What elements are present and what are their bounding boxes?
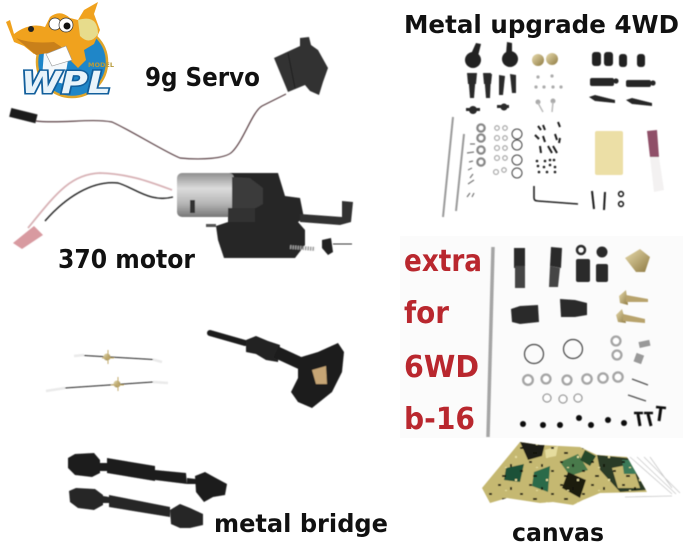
washers bbox=[523, 337, 623, 385]
canvas cover bbox=[480, 440, 680, 506]
yellow grease pad bbox=[595, 131, 623, 175]
small rings bbox=[494, 126, 507, 174]
logo: WPL dragon bbox=[6, 2, 114, 101]
label: b-16: b-16 bbox=[404, 402, 475, 437]
label: 6WD: 6WD bbox=[404, 350, 479, 385]
label: metal bridge: metal bridge bbox=[214, 509, 388, 538]
label: 370 motor: 370 motor bbox=[58, 245, 195, 275]
dark pins and nuts bbox=[592, 191, 605, 210]
drive shaft upper bbox=[68, 453, 227, 502]
bearings bbox=[477, 124, 485, 166]
long steel rods bbox=[443, 117, 453, 217]
allen key bbox=[534, 186, 578, 204]
axle with housing bbox=[210, 333, 344, 408]
servo with wire bbox=[9, 37, 328, 159]
black rods and dog bones bbox=[589, 78, 656, 106]
brass gears bbox=[532, 54, 544, 66]
parts: metal upgrade 4WD kit bbox=[443, 42, 664, 217]
label: for: for bbox=[404, 296, 449, 331]
grease tube bbox=[647, 130, 659, 157]
barrels and pins bbox=[638, 340, 650, 348]
label: canvas: canvas bbox=[512, 518, 604, 547]
brass diff gear bbox=[625, 249, 650, 272]
steering hubs bbox=[465, 42, 518, 68]
black caps bbox=[592, 52, 645, 67]
logo model tag: MODEL bbox=[88, 62, 114, 69]
drive shaft lower bbox=[69, 488, 203, 528]
black screws bbox=[535, 122, 560, 153]
logo wordmark: WPL bbox=[21, 66, 111, 101]
brass pinions bbox=[616, 290, 648, 323]
camouflage fabric bbox=[480, 440, 650, 506]
label: extra: extra bbox=[404, 244, 482, 279]
pins bbox=[467, 144, 475, 197]
label: 9g Servo: 9g Servo bbox=[145, 63, 260, 93]
drive shafts bbox=[68, 453, 227, 528]
small pin shafts bbox=[46, 350, 168, 391]
tiny silver screws bbox=[534, 74, 563, 112]
long shaft bbox=[488, 247, 493, 437]
O rings bbox=[512, 129, 522, 178]
canvas wire frame bbox=[625, 457, 680, 497]
black screws bbox=[638, 407, 661, 426]
panel: 6WD background bbox=[400, 236, 683, 438]
drive cups bbox=[466, 73, 516, 114]
black dots bbox=[520, 415, 627, 428]
black cups bbox=[511, 246, 608, 324]
parts: extra for 6WD kit bbox=[488, 246, 666, 437]
O rings bbox=[524, 344, 544, 364]
motor with gearbox bbox=[13, 173, 353, 258]
label: Metal upgrade 4WD: Metal upgrade 4WD bbox=[404, 10, 679, 39]
